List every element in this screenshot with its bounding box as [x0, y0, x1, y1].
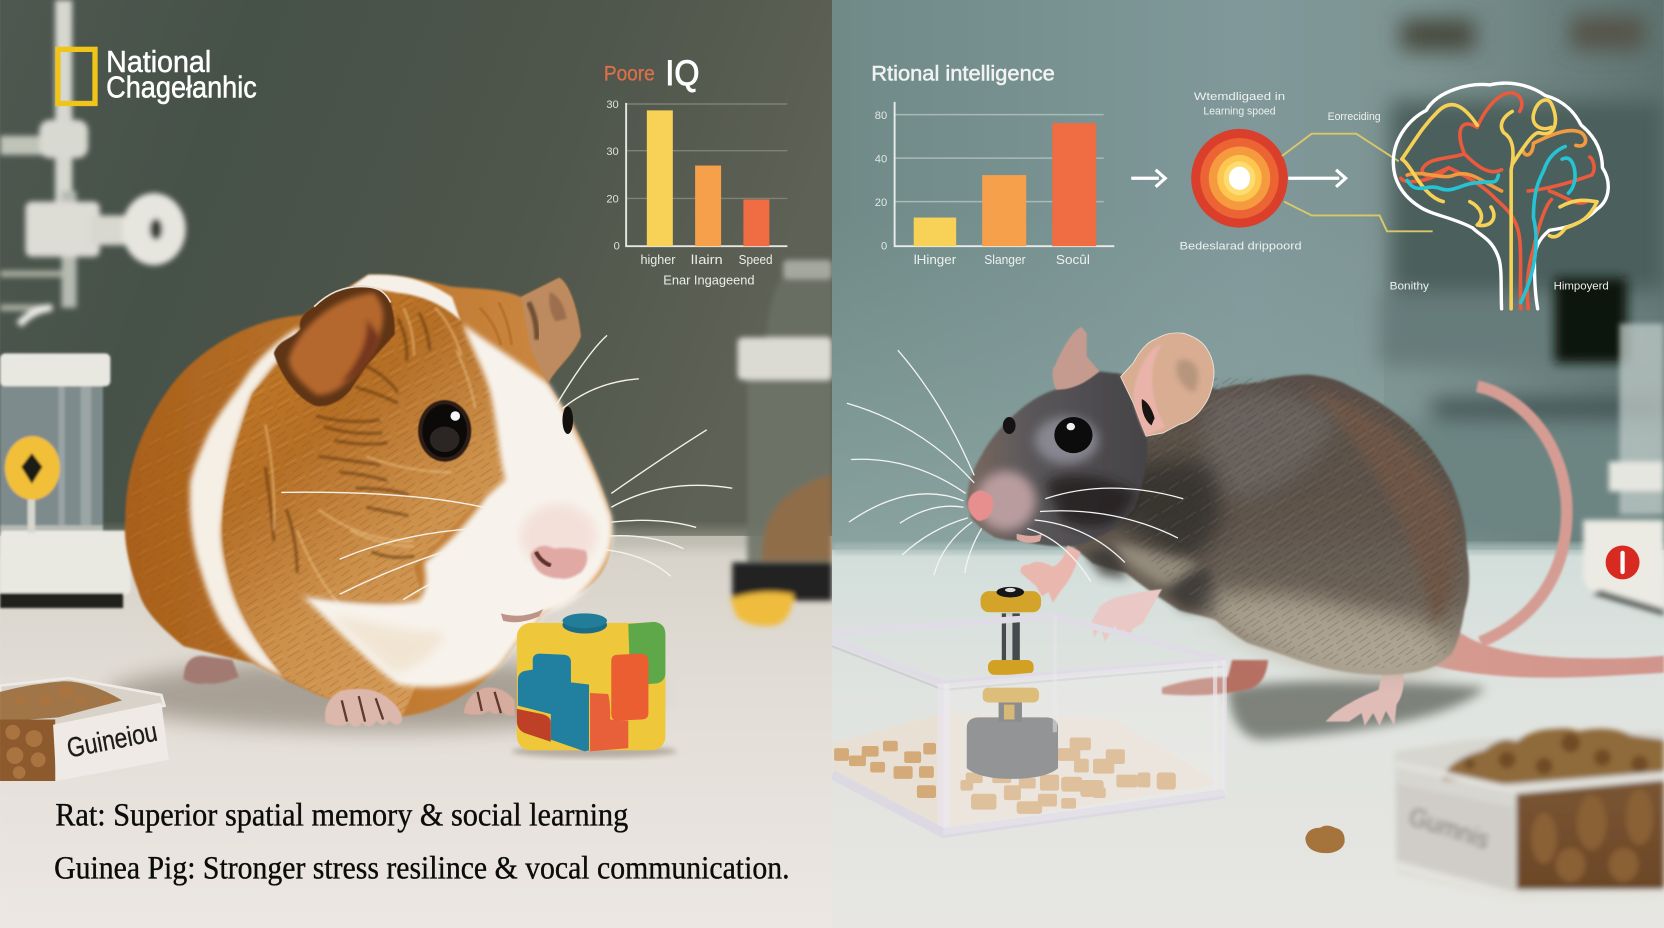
far eye	[1003, 417, 1016, 434]
toy base and rod	[967, 587, 1058, 779]
heading: Poore IQ: Poore	[604, 63, 655, 86]
blurred equipment right	[1583, 324, 1664, 615]
bar chart: guinea pig IQ: 30	[606, 99, 619, 111]
box glass tint	[943, 660, 1225, 835]
reddish back fur	[1305, 387, 1455, 626]
caption: rat and guinea pig summary: Rat: Superior spatial memory & social learning	[55, 798, 628, 834]
rat fur texture	[1125, 378, 1463, 668]
bar chart: rat intelligence: Socûl	[1056, 252, 1090, 267]
hind leg and foot near	[1325, 669, 1404, 726]
guinea pig food tub	[0, 678, 165, 781]
right ear	[521, 278, 581, 383]
diagram labels: Eorreciding	[1328, 111, 1381, 123]
dark cheek band	[1045, 475, 1135, 527]
blurred lab clamp stand	[0, 0, 186, 325]
back paw	[184, 656, 239, 684]
lab wall background	[0, 0, 832, 557]
bar chart: guinea pig IQ: Enar Ingageend	[663, 272, 755, 287]
far eye	[562, 406, 573, 434]
back fur texture	[127, 318, 302, 663]
brain outline	[1393, 83, 1608, 309]
heading: Rational intelligence: Rtional intelligence	[871, 63, 1055, 86]
yellow branches	[1402, 100, 1597, 309]
puzzle box with toy lever	[832, 587, 1225, 835]
rat	[847, 327, 1469, 726]
chest warm shading	[329, 613, 446, 673]
bar chart: guinea pig IQ: higher	[640, 252, 676, 267]
muzzle	[976, 471, 1036, 531]
mouth	[1017, 534, 1042, 543]
bar chart: guinea pig IQ	[606, 99, 787, 287]
dark fur streaks	[265, 313, 430, 573]
bar chart: rat intelligence	[875, 102, 1114, 267]
rat shadow	[1228, 681, 1486, 740]
chest cream	[1109, 541, 1199, 589]
white face blaze and chest	[302, 324, 612, 687]
box floor	[833, 713, 1220, 829]
diagram labels: Wtemdligaed in	[1194, 91, 1285, 103]
forepaw on box	[1092, 589, 1162, 642]
rat food tub	[1394, 728, 1664, 902]
whiskers	[281, 335, 732, 600]
diagram labels: Himpoyerd	[1554, 281, 1609, 293]
bar chart: rat intelligence: 20	[875, 197, 887, 209]
target circle: learning speed	[1191, 129, 1288, 228]
rat food tub: Gumnis	[1405, 803, 1493, 855]
bar chart: rat intelligence: 80	[875, 110, 887, 122]
hind foot far	[1162, 660, 1268, 695]
guinea pig	[125, 275, 732, 727]
heading: Poore IQ	[605, 60, 698, 92]
blurred glass jar with sign	[0, 353, 131, 608]
white back stripe	[190, 327, 302, 679]
body	[971, 374, 1469, 675]
connector lines	[1282, 134, 1433, 231]
grey shoulder	[1203, 392, 1337, 499]
lab table surface	[832, 543, 1664, 928]
bar chart: guinea pig IQ: 20	[606, 194, 619, 206]
pellets in box	[834, 738, 1176, 814]
paws	[325, 687, 515, 727]
small ear	[1053, 327, 1099, 390]
blurred shelves and equipment	[1358, 16, 1664, 539]
lab wall background	[832, 0, 1664, 562]
diagram labels: Learning spoed	[1203, 106, 1276, 118]
eye	[418, 400, 471, 462]
lavender eye patch	[1035, 417, 1098, 464]
diagram labels: Bedeslarad drippoord	[1180, 240, 1302, 252]
head	[967, 371, 1148, 546]
muzzle blush	[520, 503, 597, 557]
blurred black monitor	[1555, 278, 1627, 363]
bar chart: guinea pig IQ: 0	[614, 240, 620, 252]
light fur streaks	[265, 308, 475, 605]
logo: National Geographic style: Chagełanhic	[106, 70, 257, 105]
diagram labels: Bonithy	[1390, 281, 1429, 293]
blurred jar on the right	[730, 260, 832, 626]
stray food pellet	[1305, 826, 1345, 853]
tub label: Guineiou	[53, 702, 169, 781]
rat tail along table	[1427, 626, 1664, 678]
bar chart: guinea pig IQ: lIairn	[691, 252, 723, 267]
body	[125, 275, 612, 716]
rat whiskers	[847, 350, 1183, 582]
tub label: Guineiou: Guineiou	[64, 716, 160, 764]
bar chart: rat intelligence: 40	[875, 153, 887, 165]
forehead orange streaks	[480, 302, 512, 345]
arrow: target to brain	[1288, 170, 1346, 187]
eye	[1054, 417, 1093, 453]
dark chest patch	[1085, 547, 1220, 610]
dark neck band	[1093, 460, 1221, 562]
guinea pig shadow	[106, 659, 658, 731]
puzzle cube toy	[512, 613, 677, 758]
nose and mouth	[501, 546, 587, 622]
forepaw on toy	[1021, 545, 1080, 603]
bar chart: rat intelligence: lHinger	[914, 252, 957, 267]
caption: rat and guinea pig summary	[54, 798, 790, 887]
arrow: chart to target	[1131, 170, 1165, 187]
belly highlight	[1204, 592, 1452, 675]
brain diagram	[1393, 83, 1608, 309]
cyan branches	[1407, 146, 1575, 302]
red branches	[1401, 93, 1594, 309]
big ear	[1121, 333, 1214, 436]
left ear	[274, 287, 395, 406]
head crest	[348, 275, 461, 320]
logo: National Geographic style: National	[106, 44, 211, 79]
bar chart: guinea pig IQ: 30	[606, 146, 619, 158]
bar chart: rat intelligence: Slanger	[984, 252, 1026, 267]
bar chart: guinea pig IQ: Speed	[739, 252, 773, 267]
rat tail up curve	[1477, 386, 1567, 642]
caption: rat and guinea pig summary: Guinea Pig: Stronger stress resilince & vocal communication.	[54, 851, 790, 887]
logo: National Geographic style	[58, 44, 257, 105]
nose	[968, 490, 993, 521]
flank fur texture	[223, 287, 505, 716]
panel: guinea pig	[0, 0, 832, 928]
lab table surface	[0, 528, 832, 928]
diagram labels	[1180, 91, 1609, 293]
panel: rat	[832, 0, 1664, 928]
orange flank and cheek	[223, 287, 505, 716]
heading: Poore IQ: IQ	[665, 54, 699, 93]
red warning icon	[1606, 545, 1640, 579]
orange branches	[1407, 131, 1586, 191]
clear acrylic walls	[832, 617, 1225, 835]
bar chart: rat intelligence: 0	[881, 240, 887, 252]
